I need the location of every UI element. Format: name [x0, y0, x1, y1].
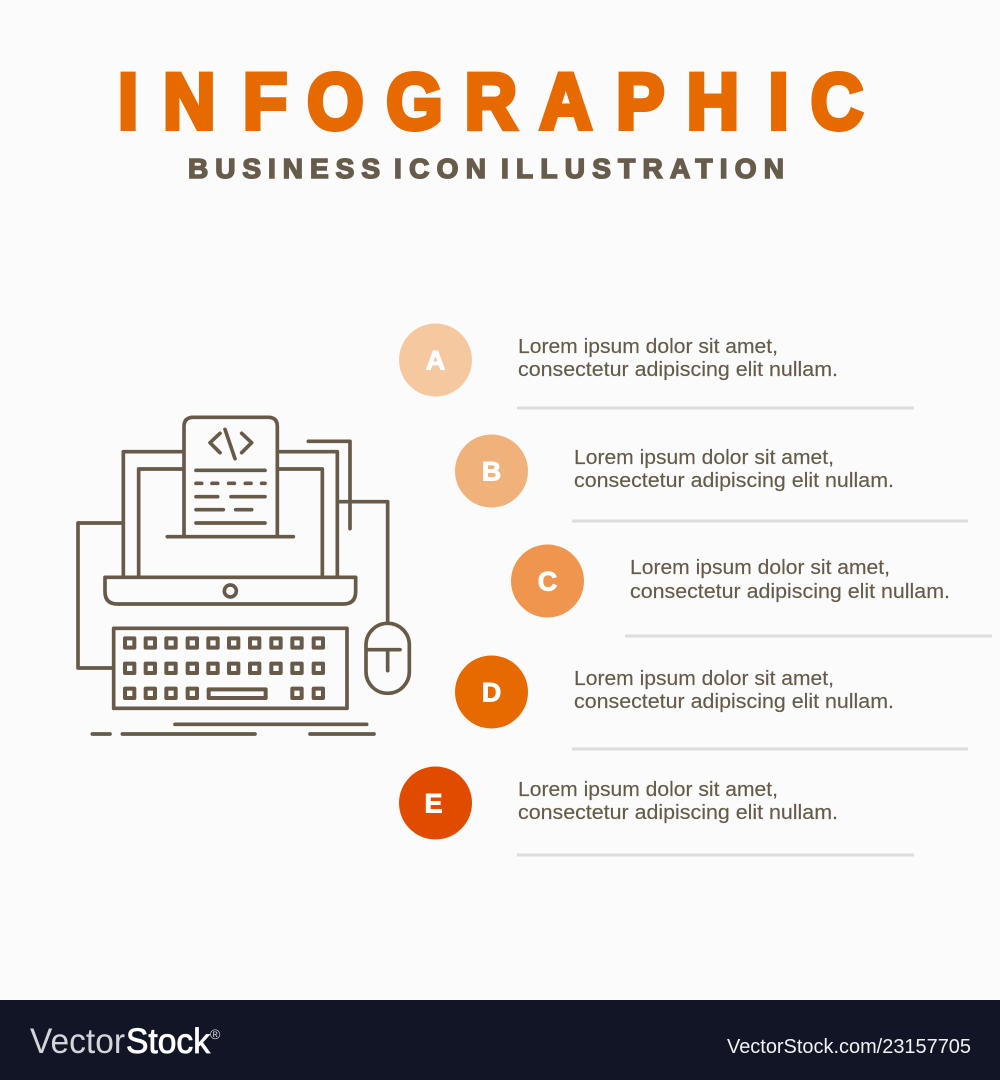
text B: consectetur adipiscing elit nullam.: [574, 469, 894, 492]
subtitle: ILLUSTRATION: [501, 153, 784, 184]
icon: keyboard: [114, 628, 347, 708]
step D: [455, 656, 968, 749]
badge C: C: [538, 566, 557, 596]
badge D: D: [482, 678, 501, 708]
icon: laptop with code document, keyboard and mouse: [78, 417, 409, 734]
subtitle: BUSINESS: [188, 153, 380, 184]
icon: laptop: [105, 452, 356, 604]
icon: cables: [78, 441, 388, 668]
step E: [399, 766, 914, 855]
footer logo: Vector: [30, 1022, 125, 1061]
icon: mouse: [366, 623, 409, 693]
badge A: A: [426, 346, 445, 376]
text C: Lorem ipsum dolor sit amet,: [630, 556, 890, 579]
footer url: VectorStock.com/23157705: [727, 1036, 971, 1058]
text C: consectetur adipiscing elit nullam.: [630, 580, 950, 603]
text B: Lorem ipsum dolor sit amet,: [574, 446, 834, 469]
text D: Lorem ipsum dolor sit amet,: [574, 667, 834, 690]
badge B: [455, 434, 528, 508]
step B: [455, 434, 968, 521]
badge E: E: [424, 788, 443, 818]
step A: [399, 324, 914, 408]
badge C: [511, 544, 584, 618]
text A: Lorem ipsum dolor sit amet,: [518, 335, 778, 358]
badge B: B: [482, 456, 501, 486]
badge A: [399, 324, 472, 396]
badge E: [399, 766, 472, 840]
text D: consectetur adipiscing elit nullam.: [574, 690, 894, 713]
footer bar: [0, 1000, 1000, 1080]
text E: consectetur adipiscing elit nullam.: [518, 801, 838, 824]
subtitle: ICON: [394, 153, 486, 184]
text A: consectetur adipiscing elit nullam.: [518, 358, 838, 381]
icon: ground lines: [92, 724, 374, 734]
badge D: [455, 656, 528, 728]
text E: Lorem ipsum dolor sit amet,: [518, 778, 778, 801]
title: INFOGRAPHIC: [118, 58, 863, 146]
step C: [511, 544, 992, 636]
footer logo: Stock: [126, 1022, 210, 1061]
icon: code document: [167, 417, 293, 537]
registered mark: ®: [210, 1026, 221, 1042]
